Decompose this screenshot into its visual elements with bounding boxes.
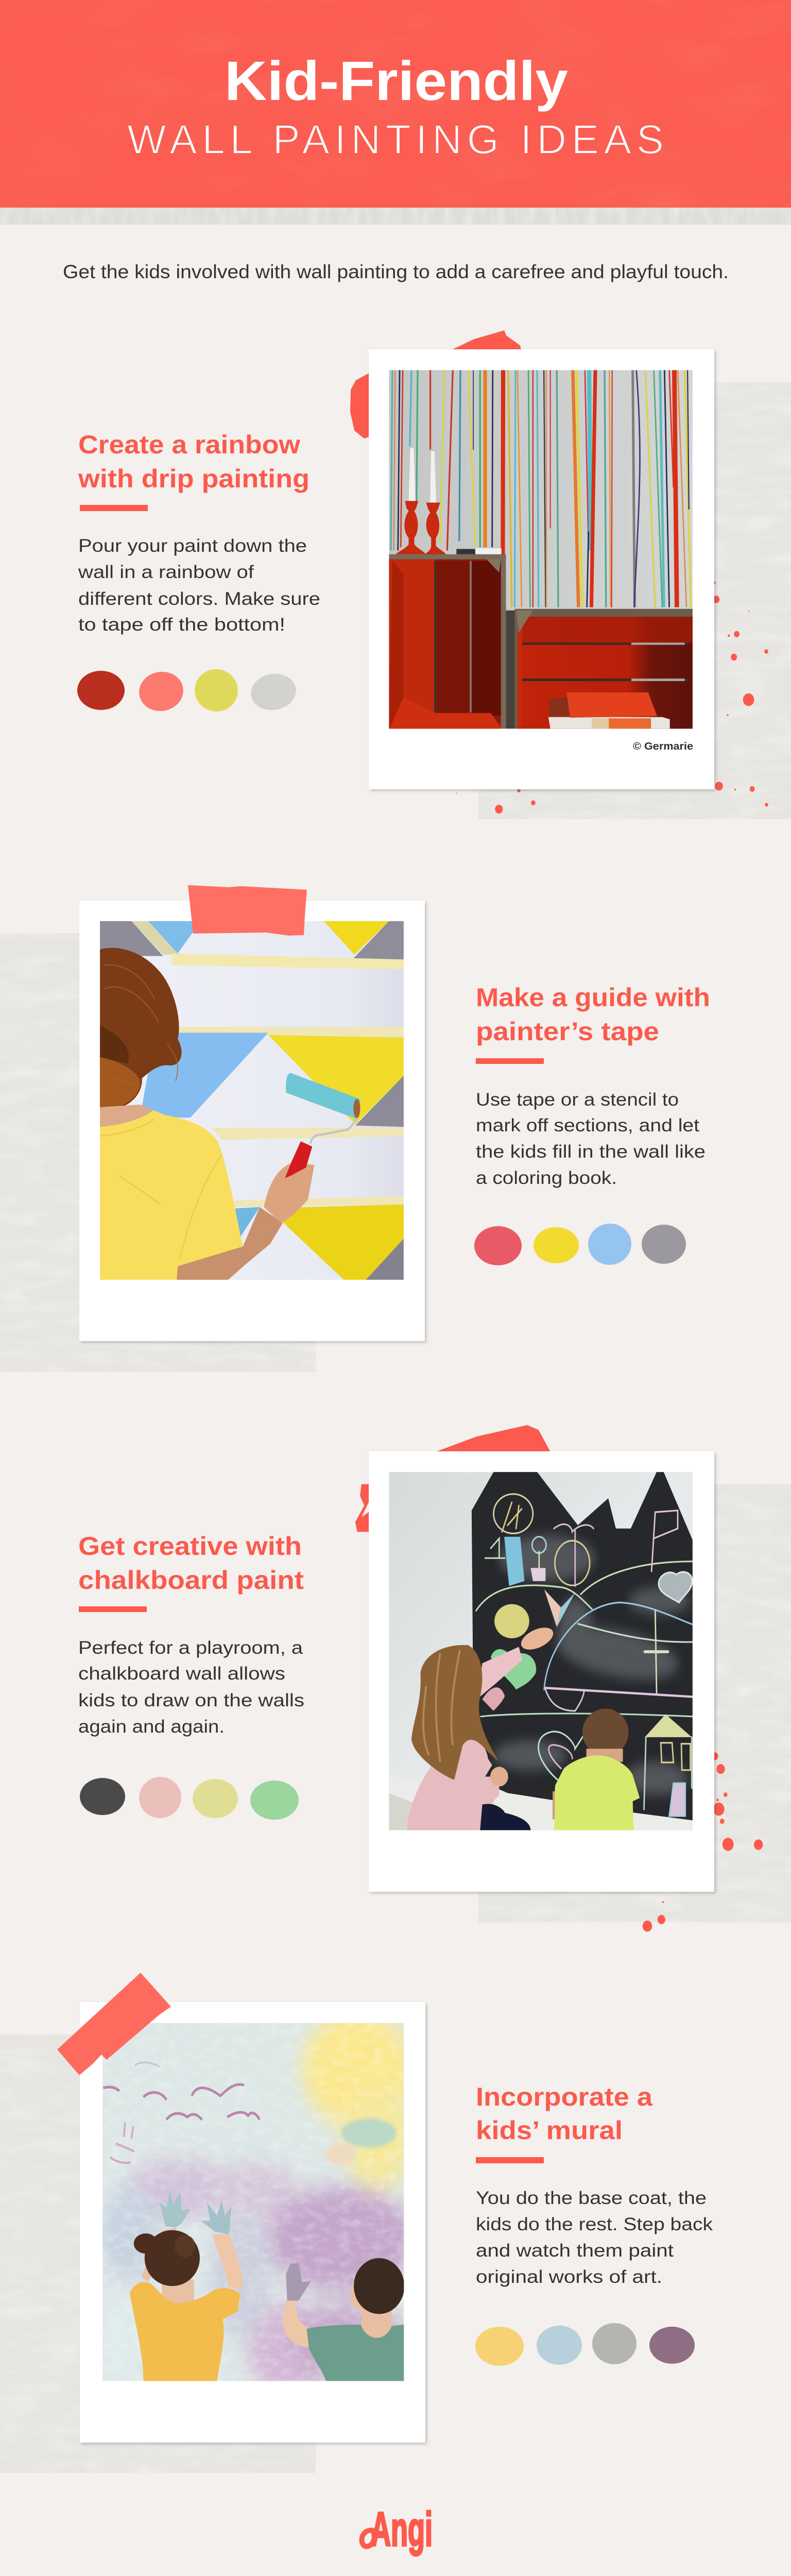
body text 2: mark off sections, and let xyxy=(476,1115,699,1136)
girl xyxy=(130,2228,243,2381)
heading 4: kids’ mural xyxy=(476,2116,623,2145)
yellow shirt xyxy=(100,1110,243,1280)
photo card 3 xyxy=(369,1451,714,1892)
low crate xyxy=(514,609,693,728)
boy xyxy=(553,1708,640,1830)
painted triangles xyxy=(100,921,404,1280)
photo: two kids painting a mural with their hands xyxy=(100,2011,415,2397)
body text 2 xyxy=(476,1090,706,1188)
body text 3: kids to draw on the walls xyxy=(78,1690,304,1710)
title: WALL PAINTING IDEAS xyxy=(127,116,664,162)
photo: kids drawing on chalkboard wall xyxy=(389,1472,693,1830)
photo card 4 xyxy=(80,2002,425,2443)
photo: rainbow drips and red crates xyxy=(389,370,693,728)
brush strokes 3 xyxy=(355,1425,551,1532)
body text 4: You do the base coat, the xyxy=(476,2188,707,2208)
candlesticks xyxy=(396,448,502,555)
hands xyxy=(160,2190,311,2301)
body text 4: original works of art. xyxy=(476,2267,662,2287)
boy xyxy=(282,2258,404,2381)
body text 3 xyxy=(78,1638,304,1737)
panel: section 2 painter's tape xyxy=(0,885,710,1372)
chalkboard xyxy=(472,1472,693,1820)
hair xyxy=(100,948,182,1109)
photo credit: © Germarie xyxy=(633,741,693,752)
tape 4 xyxy=(57,1973,171,2075)
texture background 3 xyxy=(478,1484,791,1922)
heading 3: chalkboard paint xyxy=(78,1566,304,1595)
chalk drawings xyxy=(476,1494,693,1816)
body text 2: the kids fill in the wall like xyxy=(476,1142,706,1162)
arm and hand xyxy=(100,1105,314,1280)
girl xyxy=(406,1623,556,1830)
heading 3 xyxy=(78,1532,304,1595)
title: Kid-Friendly xyxy=(225,49,568,112)
paint splatter 1 xyxy=(456,581,768,814)
birds xyxy=(103,2062,260,2163)
tall crate xyxy=(389,554,506,728)
photo: child rolling paint on geometric wall xyxy=(100,921,404,1280)
logo: Angi: Angi xyxy=(371,2502,433,2556)
title xyxy=(127,49,664,162)
rule 1 xyxy=(80,505,148,511)
heading 4: Incorporate a xyxy=(476,2082,653,2111)
body text 3: again and again. xyxy=(78,1717,225,1737)
body text 3: Perfect for a playroom, a xyxy=(78,1638,303,1658)
heading 4 xyxy=(476,2082,653,2145)
rule 4 xyxy=(476,2157,544,2163)
heading 2: painter’s tape xyxy=(476,1017,659,1046)
panel: section 1 drip painting xyxy=(77,330,791,819)
panel: section 3 chalkboard paint xyxy=(78,1425,791,1931)
heading 2 xyxy=(476,983,710,1046)
paint swatches 3 xyxy=(80,1773,299,1822)
painted mural washes xyxy=(100,2011,415,2397)
paint swatches 2 xyxy=(474,1221,686,1267)
body text 4: kids do the rest. Step back xyxy=(476,2214,713,2234)
body text 2: Use tape or a stencil to xyxy=(476,1090,679,1110)
rule 2 xyxy=(476,1058,544,1064)
body text 4: and watch them paint xyxy=(476,2241,674,2261)
tape 2 xyxy=(188,885,307,936)
heading 3: Get creative with xyxy=(78,1532,302,1561)
body text 1 xyxy=(78,536,320,635)
photo card 1 xyxy=(369,349,714,789)
paint roller xyxy=(285,1073,360,1178)
texture background 4 xyxy=(0,2035,316,2473)
texture background 2 xyxy=(0,933,316,1372)
texture background 1 xyxy=(478,382,791,819)
paint swatches 1 xyxy=(77,665,299,716)
intro text: Get the kids involved with wall painting to add a carefree and playful touch. xyxy=(63,261,729,282)
paint swatches 4 xyxy=(475,2323,695,2366)
body text 1: different colors. Make sure xyxy=(78,589,320,609)
photo card 2 xyxy=(79,901,425,1341)
heading 1: with drip painting xyxy=(78,464,309,493)
books xyxy=(548,692,670,728)
brush strokes 1 xyxy=(350,330,521,438)
paint splatter 3 xyxy=(643,1752,763,1931)
heading 1: Create a rainbow xyxy=(78,430,300,459)
heading 1 xyxy=(78,430,309,493)
header banner xyxy=(0,0,791,225)
body text 2: a coloring book. xyxy=(476,1168,617,1188)
body text 1: Pour your paint down the xyxy=(78,536,307,556)
rule 3 xyxy=(79,1606,147,1612)
body text 3: chalkboard wall allows xyxy=(78,1664,285,1684)
heading 2: Make a guide with xyxy=(476,983,710,1012)
panel: section 4 kids' mural xyxy=(0,1973,713,2473)
body text 4 xyxy=(476,2188,713,2287)
body text 1: wall in a rainbow of xyxy=(78,562,254,582)
logo: Angi xyxy=(362,2502,433,2556)
speckles in the sun xyxy=(325,2119,397,2165)
body text 1: to tape off the bottom! xyxy=(78,615,285,635)
